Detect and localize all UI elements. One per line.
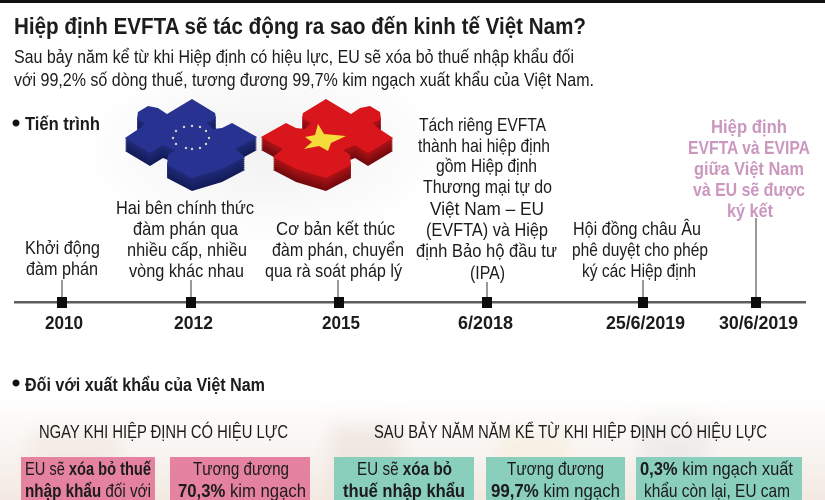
milestone 6/2018: gồm Hiệp định: [436, 156, 537, 176]
box: 0,3% teal: 0,3% kim ngạch xuất: [640, 459, 793, 479]
milestone 6/2018: (EVFTA) và Hiệp: [426, 220, 548, 240]
timeline years: 2010: [45, 313, 83, 333]
milestone 6/2018: Thương mại tự do: [423, 177, 552, 197]
milestone 2010: đàm phán: [26, 259, 98, 279]
milestone 2015: [265, 219, 404, 281]
title: Hiệp định EVFTA sẽ tác động ra sao đến kinh tế Việt Nam?: [14, 13, 586, 39]
subheading: immediately: NGAY KHI HIỆP ĐỊNH CÓ HIỆU LỰC: [39, 421, 288, 442]
timeline years: 25/6/2019: [606, 313, 685, 333]
milestone 6/2018: (IPA): [470, 263, 505, 283]
milestone 2012: nhiều cấp, nhiều: [127, 240, 247, 260]
milestone 6/2018: Tách riêng EVFTA: [419, 115, 546, 135]
milestone 2010: Khởi động: [25, 238, 100, 258]
intro text: Sau bảy năm kể từ khi Hiệp định có hiệu lực, EU sẽ xóa bỏ thuế nhập khẩu đối: [14, 47, 574, 67]
milestone 2015: đàm phán, chuyển: [272, 240, 404, 260]
timeline years: 2015: [322, 313, 360, 333]
box: 99,7% teal: [486, 457, 625, 500]
timeline years: 6/2018: [458, 313, 513, 333]
timeline axis: [14, 218, 806, 308]
box: 70,3% pink: Tương đương: [193, 459, 289, 479]
timeline years: 2012: [174, 313, 213, 333]
milestone 30/6/2019: ký kết: [727, 201, 773, 221]
milestone 2012: vòng khác nhau: [129, 261, 244, 281]
milestone 25/6/2019: Hội đồng châu Âu: [573, 219, 701, 239]
heading: timeline: Tiến trình: [25, 114, 100, 134]
milestone 30/6/2019: [688, 117, 810, 221]
timeline years: [45, 313, 798, 333]
milestone 6/2018: Việt Nam – EU: [430, 199, 544, 219]
top black bar: [0, 0, 825, 3]
heading: exports: Đối với xuất khẩu của Việt Nam: [25, 375, 265, 395]
timeline years: 30/6/2019: [719, 313, 798, 333]
icon: Vietnam puzzle piece: [261, 99, 393, 191]
milestone 2012: đàm phán qua: [133, 219, 239, 239]
milestone 6/2018: [416, 115, 557, 283]
milestone 25/6/2019: phê duyệt cho phép: [572, 240, 708, 260]
box: tariff removal pink: [21, 457, 155, 500]
box: tariff removal teal: [334, 457, 474, 500]
milestone 2012: [116, 198, 254, 281]
box: 70,3% pink: [170, 457, 310, 500]
milestone 2015: Cơ bản kết thúc: [276, 219, 395, 239]
milestone 2010: [25, 238, 100, 279]
milestone 2015: qua rà soát pháp lý: [265, 261, 402, 281]
box: tariff removal teal: EU sẽ xóa bỏ: [357, 459, 452, 479]
box: 99,7% teal: Tương đương: [507, 459, 604, 479]
intro text: [14, 47, 594, 90]
intro text: với 99,2% số dòng thuế, tương đương 99,7% kim ngạch xuất khẩu của Việt Nam.: [14, 70, 594, 90]
milestone 30/6/2019: EVFTA và EVIPA: [688, 138, 810, 158]
milestone 25/6/2019: [572, 219, 708, 281]
box: tariff removal pink: EU sẽ xóa bỏ thuế: [25, 459, 152, 479]
milestone 6/2018: định Bảo hộ đầu tư: [416, 241, 557, 261]
milestone 25/6/2019: ký các Hiệp định: [582, 261, 696, 281]
milestone 30/6/2019: Hiệp định: [711, 117, 787, 137]
box: 0,3% teal: [636, 457, 802, 500]
icon: EU puzzle piece: [125, 99, 257, 191]
milestone 6/2018: thành hai hiệp định: [418, 136, 550, 156]
milestone 2012: Hai bên chính thức: [116, 198, 254, 218]
milestone 30/6/2019: và EU sẽ được: [693, 180, 805, 200]
milestone 30/6/2019: giữa Việt Nam: [694, 159, 804, 179]
